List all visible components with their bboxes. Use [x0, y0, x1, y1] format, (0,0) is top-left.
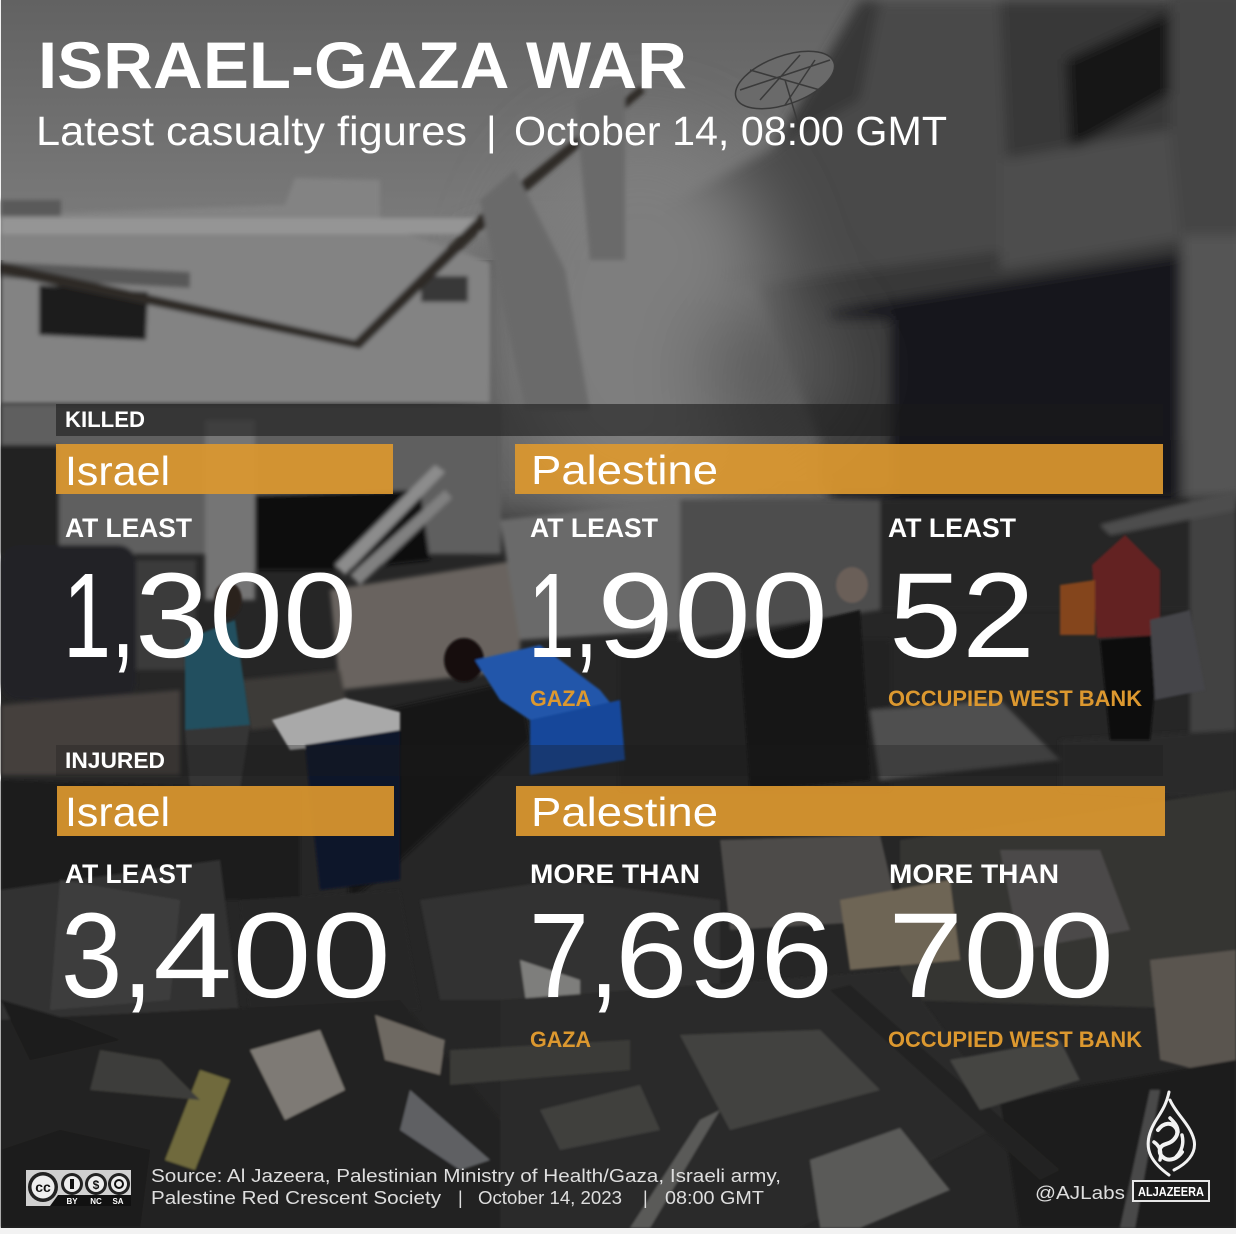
source note: Source: Al Jazeera, Palestinian Ministry of Health/Gaza, Israeli army, [151, 1166, 781, 1186]
icon: creative commons licence badge: $ [93, 1178, 100, 1192]
source note: | [458, 1188, 463, 1208]
subtitle: October 14, 08:00 GMT [514, 108, 947, 154]
stat: killed in occupied West Bank [888, 513, 1142, 711]
stat: injured in Gaza: GAZA [530, 1027, 591, 1052]
bar: injured Palestine [516, 786, 1165, 836]
middle band: wall and dark openings [1, 404, 1236, 900]
bar: killed Palestine [515, 444, 1163, 494]
source note: Palestine Red Crescent Society [151, 1188, 441, 1208]
rubble field [1, 780, 1236, 1228]
logo: Al Jazeera wordmark: ALJAZEERA [1138, 1184, 1205, 1199]
stat: injured in occupied West Bank: 700 [888, 887, 1114, 1023]
icon: creative commons licence badge: BY [66, 1197, 78, 1206]
stat: killed in Gaza: GAZA [530, 686, 591, 711]
stat: injured in occupied West Bank: MORE THAN [889, 859, 1059, 889]
stat: killed in occupied West Bank: OCCUPIED WEST BANK [888, 686, 1142, 711]
people [185, 535, 1205, 890]
source note [151, 1166, 781, 1208]
source note: 08:00 GMT [665, 1188, 764, 1208]
stat: killed in Israel: AT LEAST [65, 513, 192, 543]
subtitle: Latest casualty figures [36, 108, 467, 154]
stat: injured in Gaza [529, 859, 833, 1052]
icon: creative commons licence badge [26, 1170, 131, 1206]
smoke base [470, 240, 870, 520]
stat: injured in Gaza: 7, [529, 887, 619, 1023]
sky [1, 0, 1236, 260]
stat: killed in Israel [63, 513, 357, 683]
handle: @AJLabs: @AJLabs [1035, 1183, 1125, 1203]
stat: injured in Israel: 400 [153, 887, 391, 1023]
section label: killed: KILLED [65, 407, 145, 432]
icon: creative commons licence badge: SA [112, 1197, 124, 1206]
stat: killed in Gaza: AT LEAST [530, 513, 658, 543]
stat: injured in Israel: 3, [61, 887, 153, 1023]
stat: killed in Gaza: 900 [597, 547, 828, 683]
title: ISRAEL-GAZA WAR [38, 28, 687, 102]
icon: creative commons licence badge: NC [90, 1197, 102, 1206]
logo: Al Jazeera wordmark [1133, 1181, 1209, 1201]
upper right damaged building [660, 0, 1236, 500]
smoke column [500, 130, 840, 510]
subtitle [36, 108, 947, 154]
bar: killed Israel: Israel [65, 448, 170, 494]
bar: killed Israel [56, 444, 393, 494]
source note: October 14, 2023 [478, 1188, 622, 1208]
stat: killed in occupied West Bank: AT LEAST [888, 513, 1016, 543]
source note: | [643, 1188, 648, 1208]
subtitle: | [486, 108, 497, 154]
stat: killed in Gaza: 1, [528, 547, 598, 683]
band: killed [56, 404, 1163, 436]
icon: creative commons licence badge: cc [35, 1179, 51, 1195]
bar: killed Palestine: Palestine [531, 447, 718, 493]
stat: killed in Israel: 1, [63, 547, 135, 683]
stat: injured in Israel: AT LEAST [65, 859, 192, 889]
stat: killed in Israel: 300 [135, 547, 357, 683]
stat: injured in Gaza: MORE THAN [530, 859, 700, 889]
band: injured [56, 745, 1163, 776]
stat: injured in Gaza: 696 [615, 887, 833, 1023]
stat: injured in occupied West Bank: OCCUPIED WEST BANK [888, 1027, 1142, 1052]
section label: injured: INJURED [65, 748, 165, 773]
bar: injured Israel: Israel [65, 789, 170, 835]
bottom margin strip [0, 1228, 1236, 1234]
stat: killed in occupied West Bank: 52 [889, 547, 1035, 683]
stat: injured in occupied West Bank [888, 859, 1142, 1052]
bar: injured Israel [57, 786, 394, 836]
icon: Al Jazeera calligraphy logo [1148, 1092, 1194, 1175]
satellite dish [728, 40, 842, 130]
stat: killed in Gaza [528, 513, 828, 711]
left building [1, 80, 645, 410]
bar: injured Palestine: Palestine [531, 789, 718, 835]
stat: injured in Israel [61, 859, 391, 1023]
